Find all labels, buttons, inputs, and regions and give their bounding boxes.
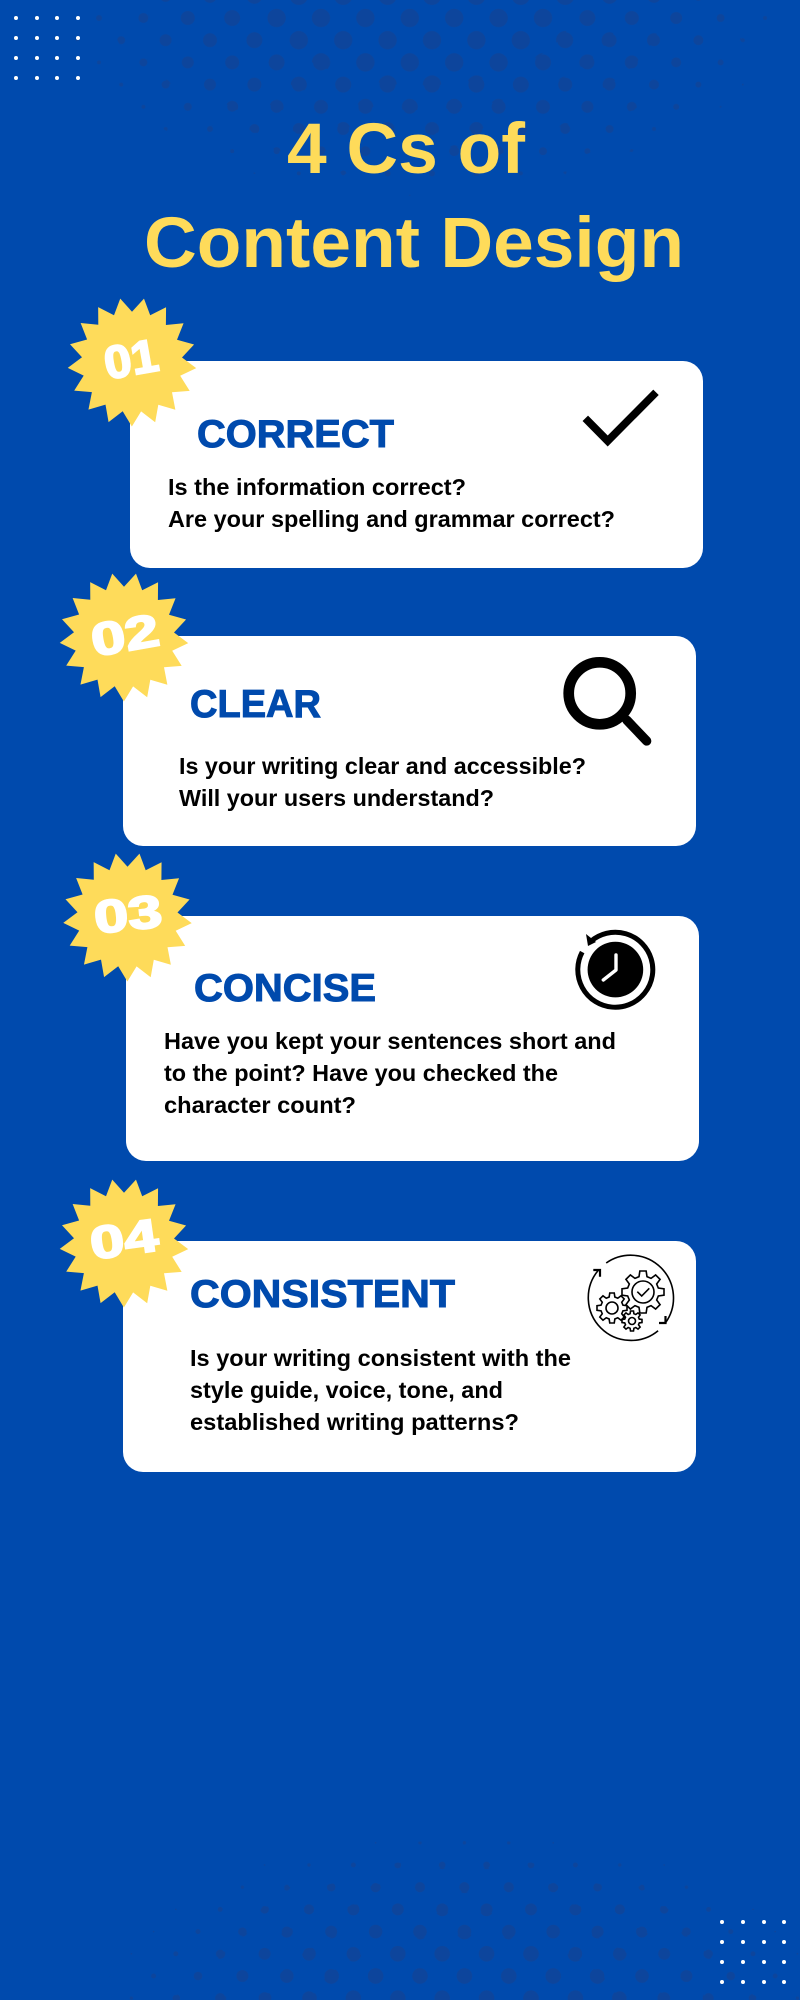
card background [126,916,699,1161]
badge: 01: 01 [100,329,162,389]
white dot grid: top left [14,16,80,80]
body text: correct: Are your spelling and grammar correct? [168,506,615,532]
heading: clear: CLEAR [190,683,321,726]
heading: concise: CONCISE [194,967,376,1010]
badge: 02: 02 [87,603,163,667]
body text: consistent: Is your writing consistent with the [190,1345,571,1371]
icon: check mark [585,392,656,441]
halftone dots: top [60,0,780,196]
panel: clear [60,574,696,846]
body text: correct [168,474,615,532]
title: Content Design [144,204,684,283]
badge: 03 [63,854,192,982]
panel: correct [68,299,703,568]
badge: 01 [68,299,196,426]
icon: gears in cycle [588,1255,673,1340]
body text: clear: Is your writing clear and accessible? [179,753,586,779]
badge: 02 [60,574,188,702]
heading: consistent: CONSISTENT [190,1273,455,1316]
card background [130,361,703,568]
title: 4 Cs of [287,110,525,189]
title [144,110,684,283]
icon: magnifying glass [569,662,647,741]
heading: correct: CORRECT [197,413,394,456]
halftone dots: bottom [104,1831,800,2000]
badge: 04: 04 [87,1208,162,1269]
body text: clear [179,753,586,811]
body text: concise: to the point? Have you checked the [164,1060,558,1086]
body text: correct: Is the information correct? [168,474,466,500]
panel: concise [63,854,699,1161]
body text: concise [164,1028,616,1118]
body text: concise: character count? [164,1092,356,1118]
body text: consistent: style guide, voice, tone, and [190,1377,503,1403]
icon: stopwatch clock [578,932,653,1007]
card background [123,636,696,846]
body text: concise: Have you kept your sentences short and [164,1028,616,1054]
card background [123,1241,696,1472]
badge: 04 [60,1180,188,1308]
body text: clear: Will your users understand? [179,785,494,811]
panel: consistent [60,1180,696,1472]
body text: consistent [190,1345,571,1435]
white dot grid: bottom right [720,1920,786,1984]
badge: 03: 03 [91,885,165,943]
body text: consistent: established writing patterns? [190,1409,519,1435]
